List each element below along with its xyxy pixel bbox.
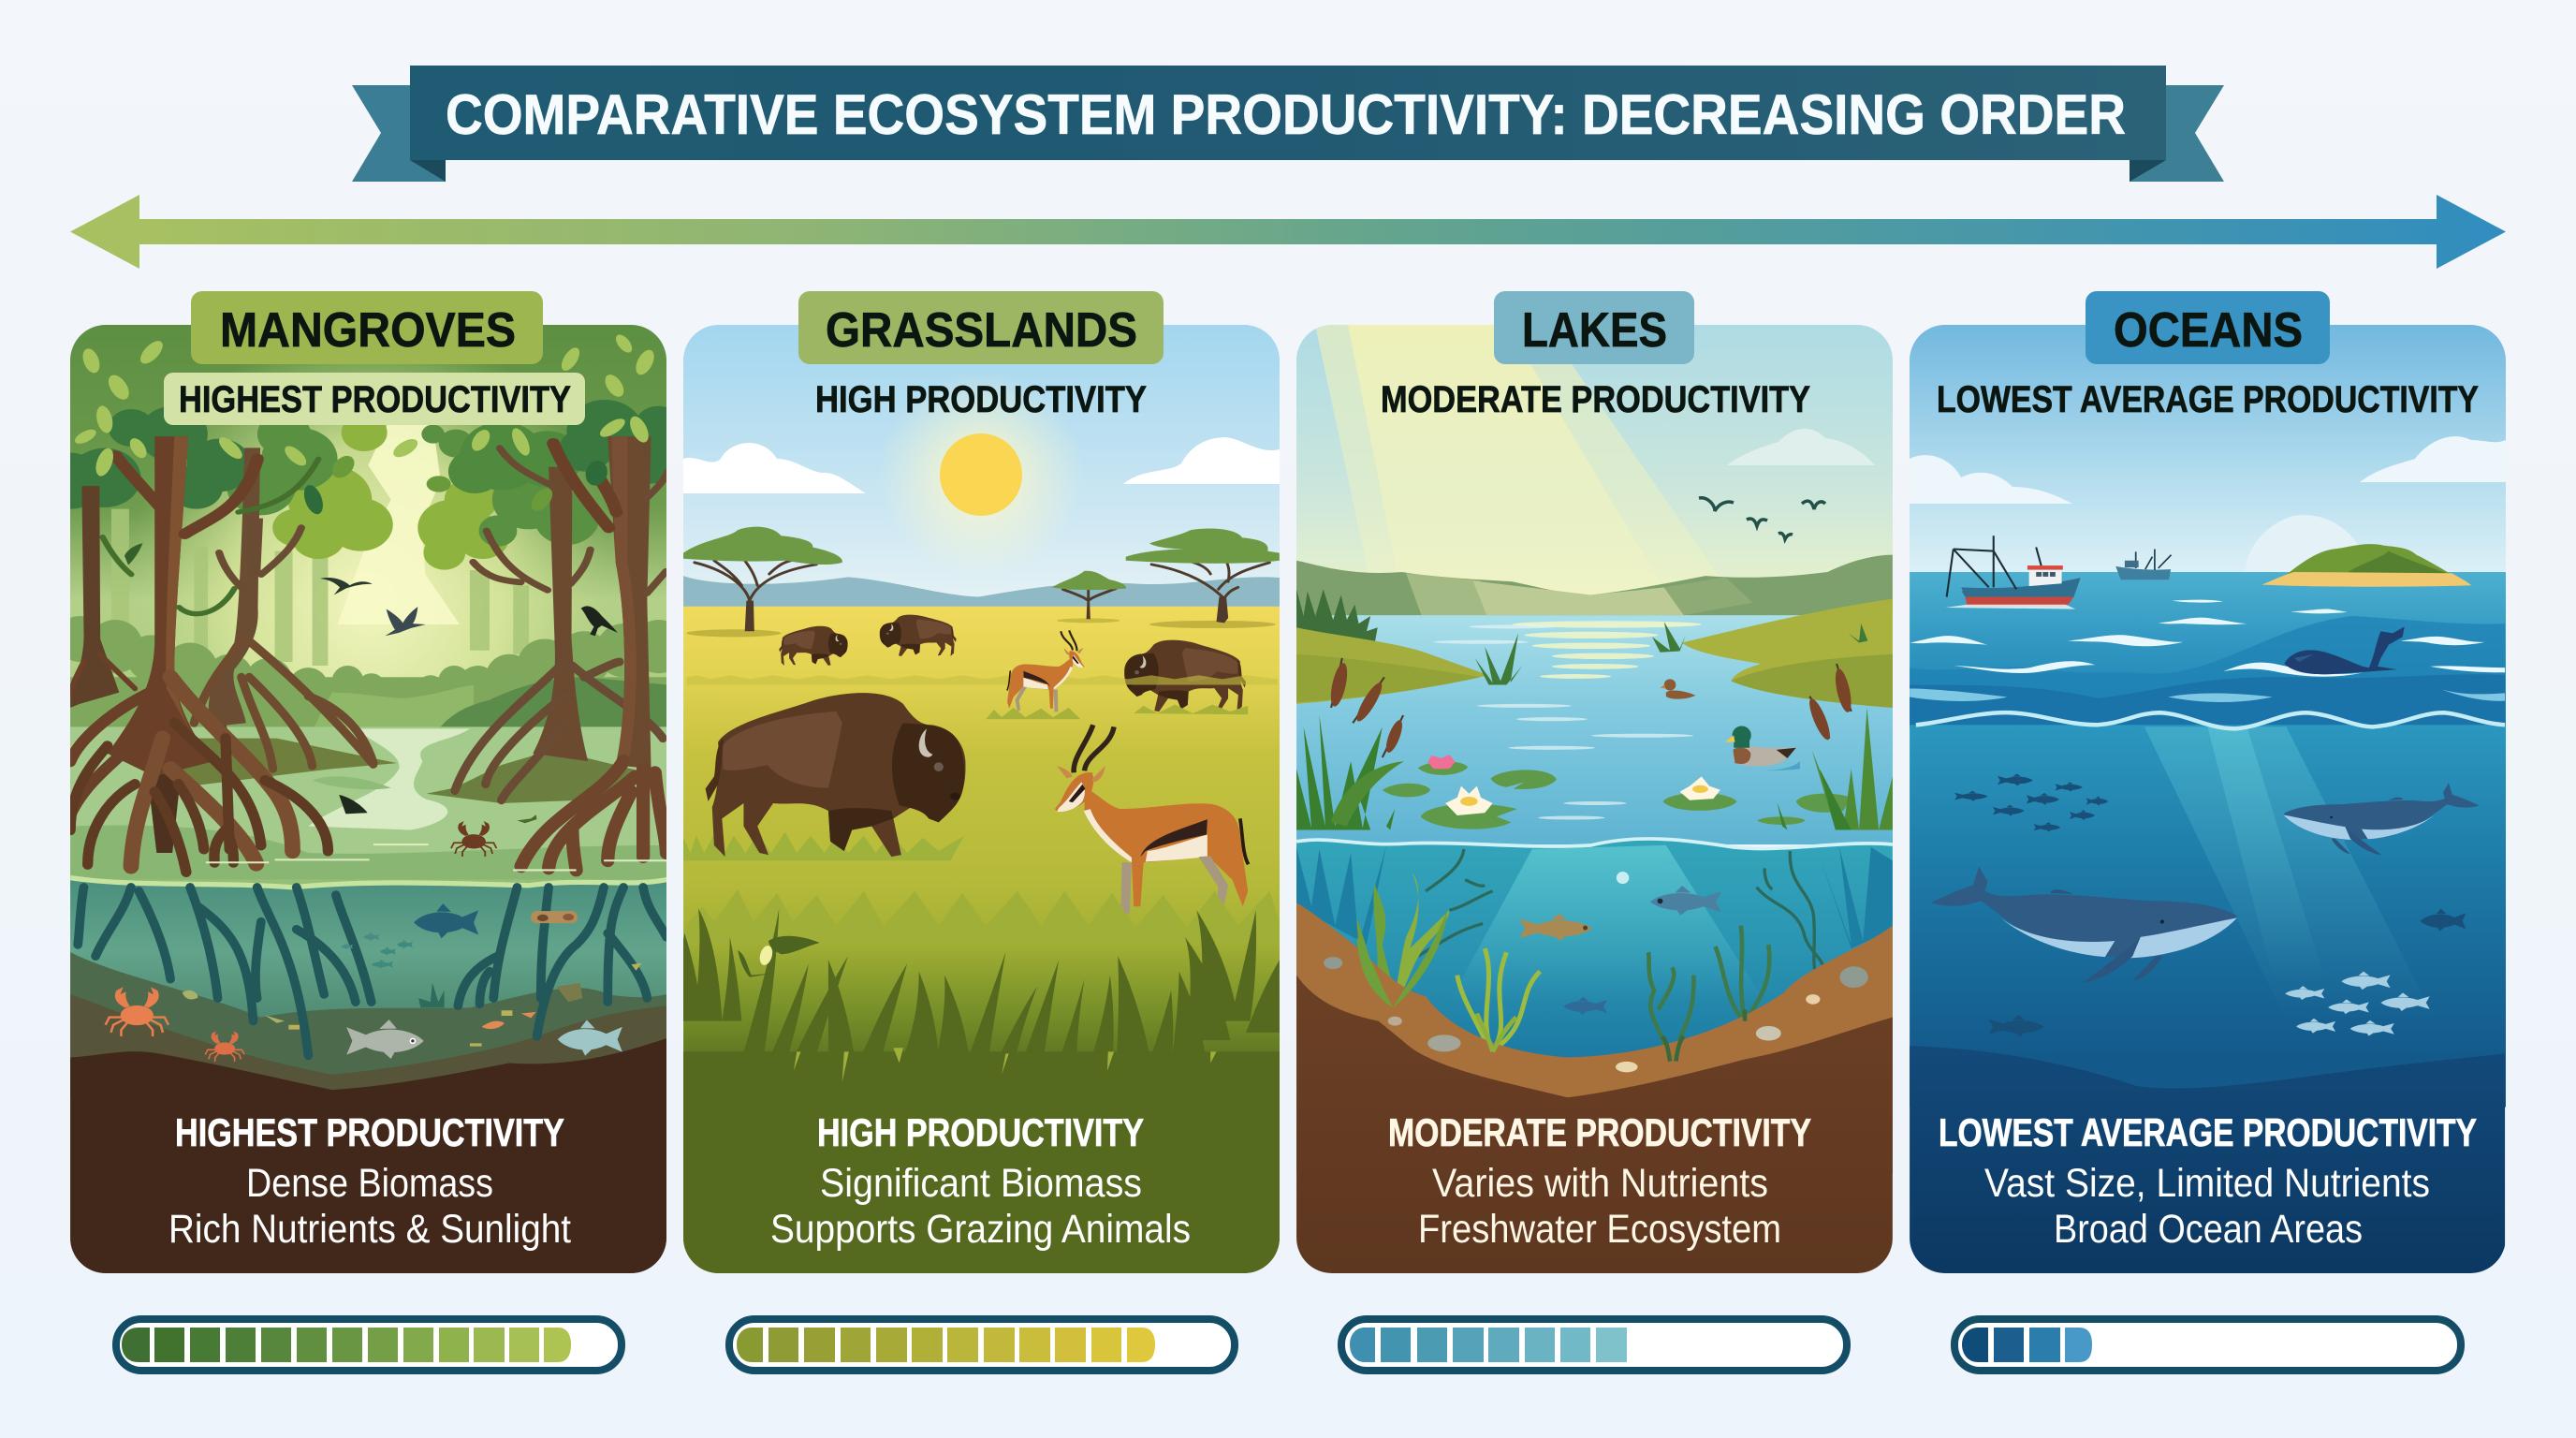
mangrove scene illustration <box>36 318 686 1273</box>
subtitle: lowest average productivity: LOWEST AVERAGE PRODUCTIVITY <box>1937 379 2479 420</box>
ribbon tail right <box>2130 85 2224 182</box>
caption: grasslands: Supports Grazing Animals <box>770 1207 1191 1252</box>
productivity meter: oceans <box>1954 1319 2461 1371</box>
caption: mangroves <box>168 1110 571 1252</box>
productivity meter: mangroves <box>116 1319 622 1371</box>
subtitle: moderate productivity: MODERATE PRODUCTIVITY <box>1381 379 1810 420</box>
title text: COMPARATIVE ECOSYSTEM PRODUCTIVITY: DECREASING ORDER <box>446 83 2126 146</box>
caption: mangroves: Rich Nutrients & Sunlight <box>168 1207 571 1252</box>
title ribbon banner <box>352 66 2224 182</box>
caption: lakes: MODERATE PRODUCTIVITY <box>1388 1110 1811 1154</box>
caption: lakes: Freshwater Ecosystem <box>1418 1207 1781 1252</box>
tag: grasslands <box>798 291 1164 364</box>
tag: lakes <box>1494 291 1694 364</box>
tag: oceans <box>2086 291 2330 364</box>
caption: mangroves: Dense Biomass <box>246 1161 493 1206</box>
caption: grasslands: HIGH PRODUCTIVITY <box>817 1110 1144 1154</box>
ocean scene illustration <box>1910 325 2507 1273</box>
caption: grasslands: Significant Biomass <box>820 1161 1142 1206</box>
subtitle: highest productivity: HIGHEST PRODUCTIVITY <box>179 379 571 420</box>
tag: mangroves <box>191 291 543 364</box>
tag: lakes: LAKES <box>1522 303 1667 358</box>
lake scene illustration <box>1296 325 1895 1273</box>
subtitle: high productivity: HIGH PRODUCTIVITY <box>815 379 1147 420</box>
ribbon folds <box>410 160 2166 182</box>
subtitle: highest productivity <box>164 373 585 425</box>
double-headed gradient arrow <box>70 195 2506 269</box>
productivity meter: lakes <box>1341 1319 1847 1371</box>
panel: lakes <box>1296 291 1895 1371</box>
caption: oceans <box>1939 1110 2477 1252</box>
banner bar <box>410 66 2166 160</box>
productivity meter: grasslands <box>729 1319 1235 1371</box>
tag: grasslands: GRASSLANDS <box>826 303 1137 358</box>
panel: grasslands <box>681 291 1282 1371</box>
panel: mangroves <box>36 291 686 1371</box>
caption: oceans: Vast Size, Limited Nutrients <box>1984 1161 2430 1206</box>
tag: oceans: OCEANS <box>2114 303 2303 358</box>
caption: mangroves: HIGHEST PRODUCTIVITY <box>175 1110 564 1154</box>
tag: mangroves: MANGROVES <box>220 303 516 358</box>
grassland scene illustration <box>681 325 1282 1356</box>
panel: oceans <box>1910 291 2507 1371</box>
caption: oceans: Broad Ocean Areas <box>2054 1207 2363 1252</box>
ribbon tail left <box>352 85 446 182</box>
caption: grasslands <box>770 1110 1191 1252</box>
caption: lakes: Varies with Nutrients <box>1432 1161 1768 1206</box>
caption: lakes <box>1388 1110 1811 1252</box>
